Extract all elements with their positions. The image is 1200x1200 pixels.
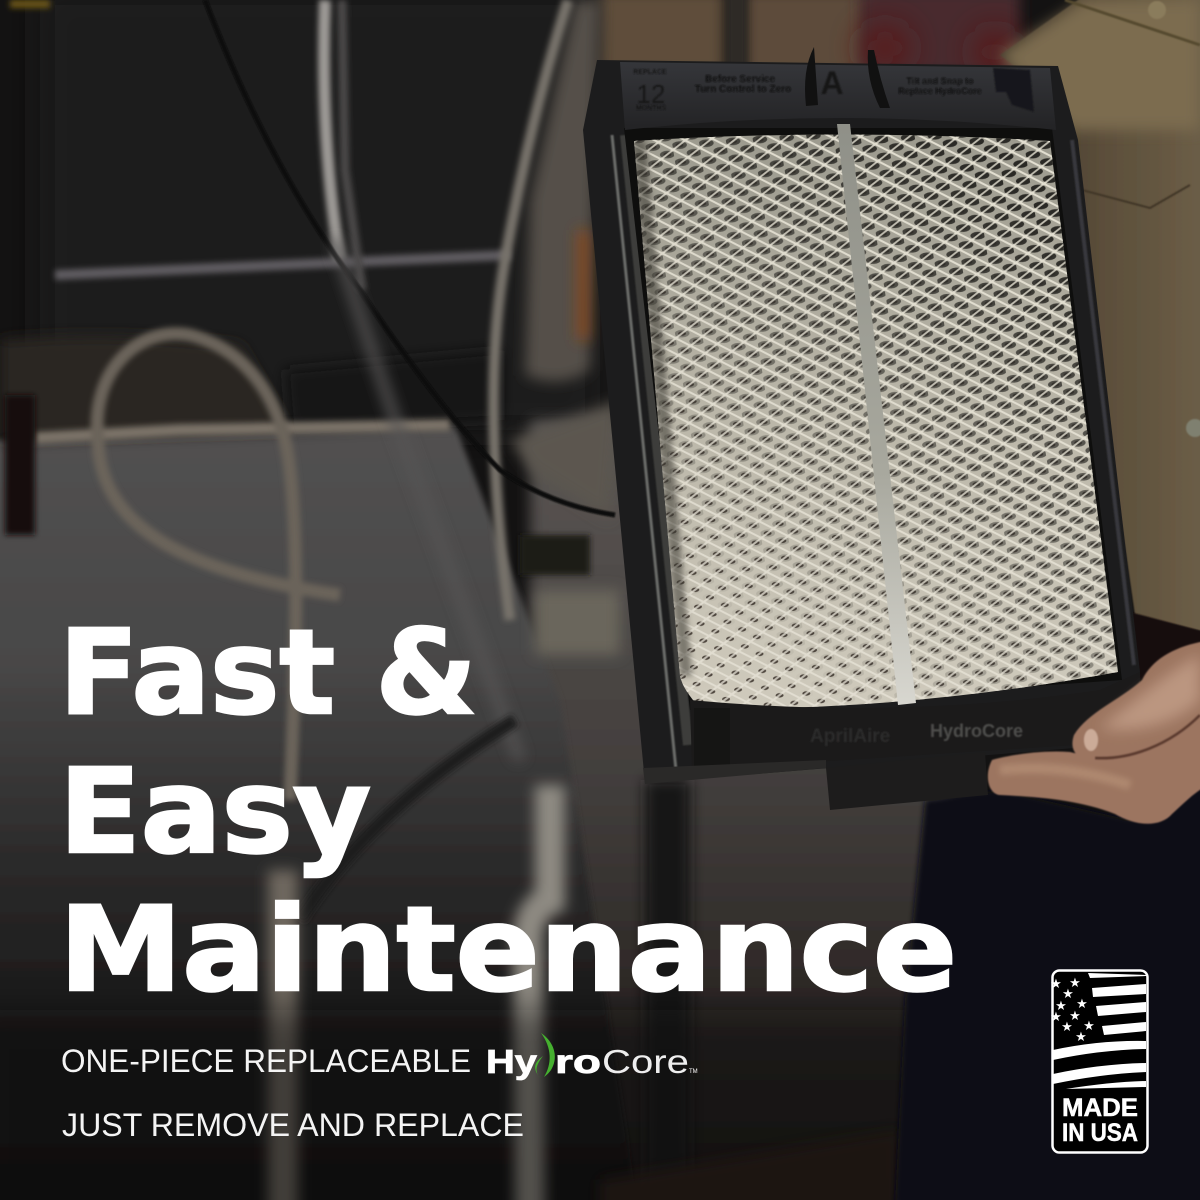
subtitle line 1 bbox=[61, 1033, 698, 1080]
background: bottom darkening bbox=[0, 1010, 930, 1200]
top band label: replace bbox=[633, 69, 667, 112]
background: yellow speck bbox=[10, 0, 50, 8]
thumbnail bbox=[1084, 729, 1098, 751]
background: dark upper equipment bbox=[40, 0, 600, 430]
frame outer bbox=[583, 60, 1140, 783]
made in usa badge bbox=[1050, 970, 1148, 1152]
background: right valve bbox=[535, 590, 620, 655]
background: white pipe left bbox=[268, 870, 298, 1200]
background: horizontal rod bbox=[55, 255, 510, 275]
subtitle line 1: ONE-PIECE REPLACEABLE bbox=[61, 1043, 471, 1079]
center strip bbox=[837, 124, 916, 705]
background: dark shelf bbox=[0, 336, 290, 440]
background: floor bar bbox=[600, 1130, 900, 1200]
background: black cable bbox=[205, 0, 615, 515]
shirt pocket bbox=[1082, 185, 1190, 208]
lower tab bbox=[826, 752, 988, 810]
background: upper pipe second bbox=[342, 0, 362, 290]
right corner shape bbox=[993, 68, 1034, 112]
lower shirt button bbox=[1186, 419, 1200, 437]
title: Maintenance bbox=[59, 881, 957, 1018]
green drop arcs bbox=[535, 1033, 555, 1078]
frame left rail highlight bbox=[612, 135, 676, 770]
bottom band label: HydroCore bbox=[930, 721, 1023, 741]
flag stars: ★ bbox=[1055, 998, 1067, 1013]
mesh base bbox=[634, 134, 1118, 708]
mesh recess bbox=[624, 128, 1122, 710]
flag stars: ★ bbox=[1062, 986, 1074, 1001]
finger crease bbox=[1095, 715, 1200, 758]
subtitle line 2: JUST REMOVE AND REPLACE bbox=[62, 1107, 524, 1143]
background: red accent right bbox=[975, 30, 1015, 74]
background: red blur bbox=[860, 0, 1020, 75]
recycling tile bbox=[694, 708, 730, 766]
shirt upper light bbox=[1000, 0, 1200, 130]
flag stars: ★ bbox=[1050, 976, 1062, 991]
HydroCore logo: ro bbox=[555, 1043, 601, 1080]
flag stripes bbox=[1053, 973, 1146, 1089]
frame left inner rail bbox=[625, 135, 688, 745]
flag stars bbox=[1050, 975, 1095, 1044]
hand bbox=[988, 642, 1200, 824]
background: red accent left bbox=[861, 26, 909, 70]
flag stars: ★ bbox=[1083, 1018, 1095, 1033]
HydroCore logo: TM bbox=[689, 1069, 698, 1075]
top band label: tilt and snap: Tilt and Snap to bbox=[906, 76, 974, 86]
background: warm panel left bbox=[600, 0, 725, 75]
humidifier filter unit bbox=[583, 47, 1140, 810]
top band label: replace: MONTHS bbox=[636, 105, 666, 112]
badge text: IN USA bbox=[1062, 1119, 1138, 1147]
mesh large holes bbox=[634, 134, 1117, 704]
badge text bbox=[1062, 1094, 1138, 1147]
background: vertical dark pipe bbox=[645, 780, 690, 1200]
frame right rail highlight bbox=[1072, 140, 1134, 665]
shirt collar bbox=[1065, 0, 1200, 45]
badge background bbox=[1052, 970, 1148, 1152]
badge text: MADE bbox=[1062, 1094, 1138, 1122]
background: gray furnace panel bbox=[0, 425, 640, 1200]
top band label: before service: Before Service bbox=[705, 74, 775, 85]
background: orange glow bbox=[578, 230, 588, 340]
flag stars: ★ bbox=[1075, 1029, 1087, 1044]
top band label: before service bbox=[695, 74, 791, 95]
mesh left shadow bbox=[632, 141, 692, 676]
background: white pipe right bbox=[528, 785, 550, 1200]
background: dark mid equipment bbox=[285, 350, 500, 430]
mesh small holes bbox=[620, 120, 1130, 720]
background: dark bracket bbox=[5, 395, 35, 535]
background: panel top edge bbox=[35, 425, 450, 438]
trousers bbox=[895, 780, 1200, 1200]
flag stars: ★ bbox=[1061, 1019, 1073, 1034]
flag stars: ★ bbox=[1050, 1009, 1062, 1024]
background: clear tube loop bbox=[97, 334, 340, 800]
top band label: replace: 12 bbox=[637, 79, 665, 109]
background: conduit bbox=[494, 0, 568, 620]
background: warm panel right bbox=[745, 0, 870, 75]
finger highlight bbox=[1000, 768, 1130, 785]
bottom band label bbox=[810, 721, 1023, 747]
title: Fast & bbox=[59, 604, 477, 741]
flag stars: ★ bbox=[1069, 975, 1081, 990]
bottom band label: AprilAire bbox=[810, 726, 890, 747]
hand highlight bbox=[1100, 655, 1200, 730]
HydroCore logo: Hy bbox=[486, 1043, 538, 1080]
belt shadow bbox=[1130, 612, 1200, 680]
shirt bbox=[1000, 0, 1200, 632]
background: lower right duct bbox=[510, 400, 620, 520]
background: curved dark conduit bbox=[300, 720, 515, 920]
hand back and fingers bbox=[988, 642, 1200, 824]
background: dark gap bbox=[727, 0, 747, 70]
flag stars: ★ bbox=[1069, 1008, 1081, 1023]
background: gray cables bbox=[335, 240, 520, 760]
title: Easy bbox=[59, 743, 371, 880]
top band label: tilt and snap: Replace HydroCore bbox=[898, 86, 982, 96]
top band bbox=[620, 62, 1056, 130]
logo mark: A bbox=[820, 65, 844, 101]
background: dark valve shadow bbox=[520, 535, 590, 575]
top band label: tilt and snap bbox=[898, 76, 982, 96]
top band label: before service: Turn Control to Zero bbox=[695, 84, 791, 95]
HydroCore logo: Core bbox=[602, 1043, 689, 1080]
background: right wall bbox=[530, 420, 950, 1200]
center tabs bbox=[805, 47, 890, 108]
background: upper duct bbox=[525, 0, 600, 381]
flag stars: ★ bbox=[1076, 996, 1088, 1011]
title bbox=[59, 604, 957, 1018]
bottom band bbox=[690, 672, 1140, 770]
top band label: replace: REPLACE bbox=[633, 69, 667, 76]
HydroCore logo bbox=[486, 1033, 698, 1080]
lower frame shadow bbox=[643, 760, 826, 784]
background: upper pipe bbox=[324, 0, 340, 260]
shirt button bbox=[1148, 1, 1166, 19]
